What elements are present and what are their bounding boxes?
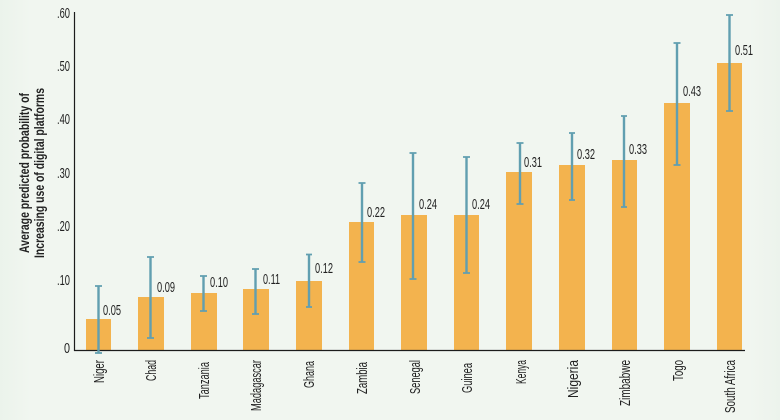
y axis tick labels: .30 (57, 166, 70, 182)
value labels: 0.05 (103, 303, 121, 319)
y axis title (16, 88, 47, 258)
country labels: Zambia (354, 362, 371, 394)
value labels: 0.33 (629, 142, 647, 158)
country labels: Ghana (301, 361, 318, 388)
value labels: 0.12 (315, 261, 333, 277)
y axis tick labels: 0 (64, 341, 70, 357)
value labels (103, 43, 753, 319)
value labels: 0.24 (472, 197, 490, 213)
value labels: 0.09 (157, 280, 175, 296)
country labels: Kenya (513, 360, 530, 384)
country labels: Chad (143, 360, 160, 381)
country labels: South Africa (722, 360, 739, 413)
value labels: 0.31 (524, 155, 542, 171)
y axis tick labels: .20 (57, 219, 70, 235)
y axis tick labels: .60 (57, 6, 70, 22)
country labels: Togo (670, 360, 687, 381)
country labels: Nigeria (565, 359, 582, 398)
country labels: Madagascar (248, 360, 265, 411)
value labels: 0.10 (210, 275, 228, 291)
country labels: Niger (91, 360, 108, 383)
country labels (91, 359, 739, 413)
country labels: Tanzania (196, 362, 213, 399)
value labels: 0.24 (419, 197, 437, 213)
country labels: Senegal (407, 360, 424, 394)
error bars (95, 15, 733, 353)
y axis tick labels: .50 (57, 59, 70, 75)
y axis tick labels: .40 (57, 112, 70, 128)
country labels: Guinea (459, 363, 476, 393)
value labels: 0.11 (263, 272, 280, 288)
value labels: 0.22 (367, 205, 385, 221)
y axis tick labels (57, 6, 70, 357)
y axis title: Average predicted probability of (16, 93, 32, 253)
value labels: 0.51 (735, 43, 753, 59)
y axis title: Increasing use of digital platforms (31, 88, 47, 258)
axes (74, 12, 745, 351)
value labels: 0.32 (577, 147, 595, 163)
value labels: 0.43 (683, 84, 701, 100)
country labels: Zimbabwe (617, 360, 634, 406)
bars (86, 63, 742, 350)
y axis tick labels: .10 (57, 273, 70, 289)
